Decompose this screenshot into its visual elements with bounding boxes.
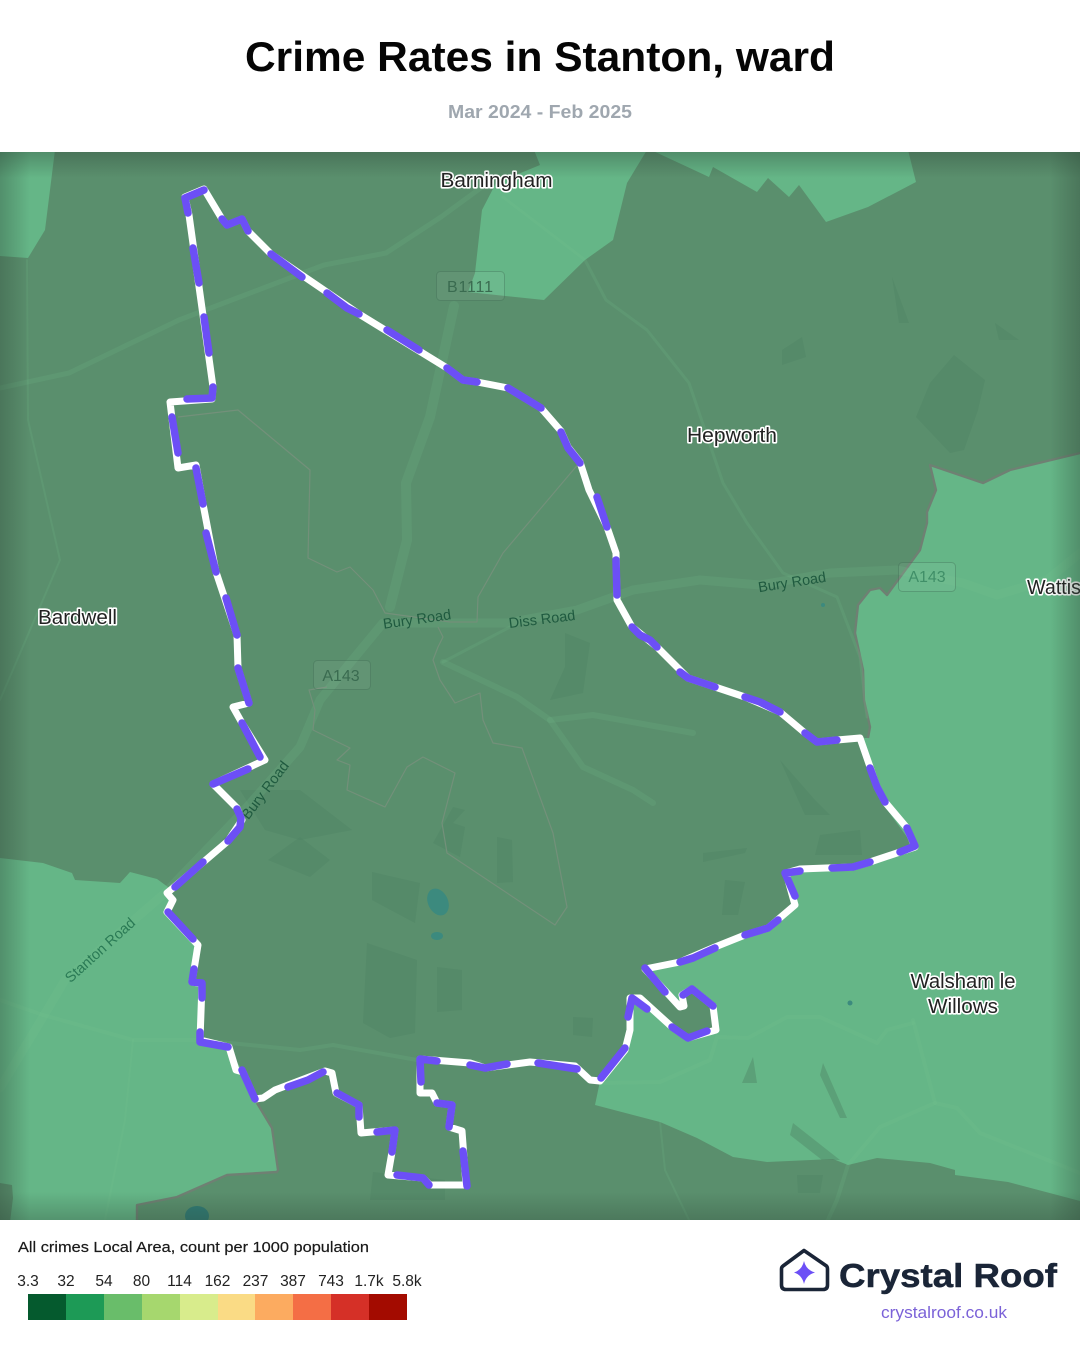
icon: house with star [782,1250,828,1290]
fields and woodland [298,839,847,1160]
road shields [314,272,956,690]
parish boundary lines [178,410,580,925]
road labels: Bury Road [757,570,827,596]
legend tick values: 80 [133,1273,150,1290]
place labels: Barningham [440,169,552,192]
legend tick values: 1.7k [354,1273,384,1290]
legend heading: All crimes Local Area, count per 1000 population [18,1239,369,1256]
road labels: B1111 [447,279,493,296]
legend tick values [17,1273,422,1290]
legend tick values: 114 [167,1273,192,1290]
legend tick values: 54 [95,1273,113,1290]
ward boundary: Stanton [167,189,915,1186]
place labels: Hepworth [687,424,777,447]
choropleth boundary edges [137,453,1080,1222]
logo url: crystalroof.co.uk [881,1304,1008,1322]
legend tick values: 237 [243,1273,268,1290]
legend colour scale [28,1294,407,1320]
legend [17,1239,422,1320]
place labels [38,169,1080,1018]
road labels: A143 [322,668,360,685]
road network [26,306,908,1191]
title: Crime Rates in Stanton, ward [245,33,835,80]
legend tick values: 162 [205,1273,230,1290]
legend tick values: 32 [57,1273,75,1290]
legend tick values: 743 [318,1273,344,1290]
legend tick values: 387 [280,1273,306,1290]
road labels: Stanton Road [62,915,139,986]
road labels: Bury Road [382,607,452,633]
panel: map [0,150,1080,1226]
place labels: Bardwell [38,606,117,629]
map edge vignette [0,152,1080,1220]
road labels: Diss Road [508,608,576,632]
road labels: A143 [908,569,946,586]
logo wordmark: Crystal Roof [839,1257,1058,1294]
map base: higher-rate area [0,152,1080,1220]
water bodies [185,603,852,1226]
road labels: Bury Road [239,758,293,823]
logo: Crystal Roof [782,1250,1058,1322]
subtitle: date range: Mar 2024 - Feb 2025 [448,101,632,122]
legend tick values: 3.3 [17,1273,39,1290]
road labels [62,279,946,986]
place labels: Walsham le [910,970,1016,993]
place labels: Willows [928,995,998,1018]
legend tick values: 5.8k [392,1273,422,1290]
choropleth: lower-rate areas [0,150,1080,1222]
